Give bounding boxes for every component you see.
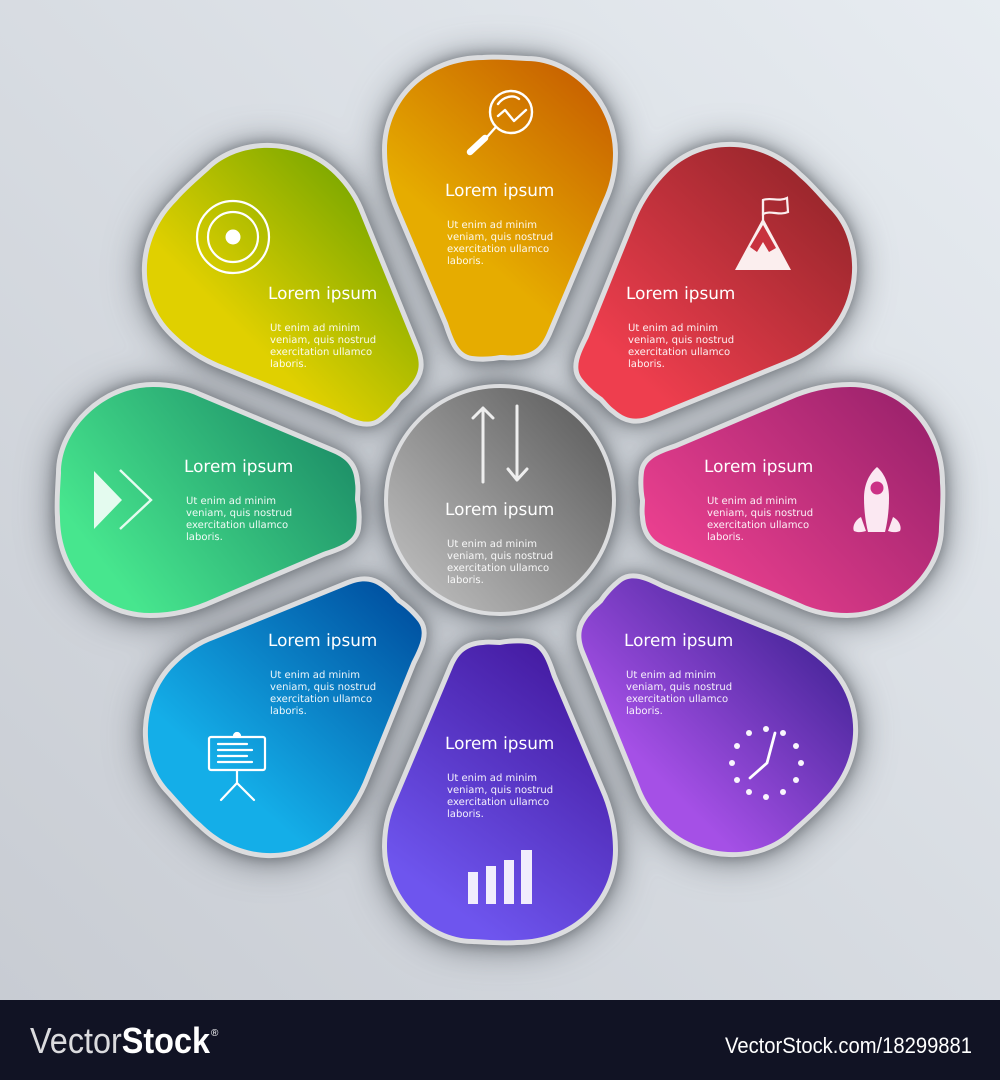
icon: flag on mountain	[735, 198, 791, 270]
text block: veniam, quis nostrud	[186, 508, 292, 519]
heading: Lorem ipsum	[445, 499, 554, 519]
panel: blue petal (lower left)	[109, 521, 479, 891]
text block: laboris.	[447, 575, 484, 586]
panel: yellow-green petal (upper left)	[109, 109, 479, 479]
heading: Lorem ipsum	[445, 180, 554, 200]
heading: Lorem ipsum	[184, 456, 293, 476]
logo mark: registered: ®	[211, 1028, 219, 1039]
text block: Ut enim ad minim	[186, 496, 276, 507]
text block: Ut enim ad minim	[707, 496, 797, 507]
heading: Lorem ipsum	[445, 733, 554, 753]
text block: Ut enim ad minim	[447, 539, 537, 550]
text block: Ut enim ad minim	[447, 220, 537, 231]
text block: veniam, quis nostrud	[270, 682, 376, 693]
panel: green petal (left)	[60, 387, 357, 613]
footer bar	[0, 1000, 1000, 1080]
icon: magnifier with chart	[470, 91, 532, 152]
panel: pink petal (right)	[643, 387, 940, 613]
text block: laboris.	[186, 532, 223, 543]
text block: laboris.	[447, 809, 484, 820]
logo: VectorStock: VectorStock	[30, 1020, 211, 1061]
icon: rocket	[853, 467, 901, 532]
heading: Lorem ipsum	[268, 283, 377, 303]
text block: Ut enim ad minim	[270, 670, 360, 681]
text block: veniam, quis nostrud	[707, 508, 813, 519]
text block: veniam, quis nostrud	[447, 551, 553, 562]
panel: orange petal (top)	[387, 60, 613, 357]
text block	[447, 220, 553, 267]
text block: exercitation ullamco	[447, 797, 549, 808]
text block	[270, 670, 376, 717]
text block: exercitation ullamco	[447, 563, 549, 574]
text block: veniam, quis nostrud	[270, 335, 376, 346]
panel: indigo petal (bottom)	[387, 643, 613, 940]
text block	[447, 539, 553, 586]
text block	[447, 773, 553, 820]
image id: VectorStock.com/18299881	[725, 1033, 972, 1058]
text block: laboris.	[270, 706, 307, 717]
icon: presentation board	[209, 733, 265, 800]
text block: Ut enim ad minim	[628, 323, 718, 334]
text block: laboris.	[626, 706, 663, 717]
text block: laboris.	[628, 359, 665, 370]
text block: laboris.	[447, 256, 484, 267]
icon: bar chart	[468, 850, 532, 904]
text block: laboris.	[707, 532, 744, 543]
icon: clock	[729, 726, 804, 800]
heading: Lorem ipsum	[268, 630, 377, 650]
text block: laboris.	[270, 359, 307, 370]
icon: forward chevrons	[94, 470, 151, 529]
text block	[628, 323, 734, 370]
icon: up and down arrows	[473, 406, 527, 482]
text block: exercitation ullamco	[186, 520, 288, 531]
heading: Lorem ipsum	[704, 456, 813, 476]
text block: veniam, quis nostrud	[628, 335, 734, 346]
text block: exercitation ullamco	[447, 244, 549, 255]
text block	[270, 323, 376, 370]
text block: veniam, quis nostrud	[447, 232, 553, 243]
heading: Lorem ipsum	[626, 283, 735, 303]
heading: Lorem ipsum	[624, 630, 733, 650]
text block: Ut enim ad minim	[270, 323, 360, 334]
text block: veniam, quis nostrud	[447, 785, 553, 796]
text block: exercitation ullamco	[628, 347, 730, 358]
text block: exercitation ullamco	[707, 520, 809, 531]
text block: veniam, quis nostrud	[626, 682, 732, 693]
text block	[707, 496, 813, 543]
panel: red petal (upper right)	[521, 109, 891, 479]
text block: exercitation ullamco	[270, 694, 372, 705]
text block: Ut enim ad minim	[447, 773, 537, 784]
panel: center grey circle	[388, 388, 612, 612]
text block	[186, 496, 292, 543]
panel: purple petal (lower right)	[521, 521, 891, 891]
text block: exercitation ullamco	[270, 347, 372, 358]
text block	[626, 670, 732, 717]
text block: exercitation ullamco	[626, 694, 728, 705]
icon: target	[197, 201, 269, 273]
text block: Ut enim ad minim	[626, 670, 716, 681]
